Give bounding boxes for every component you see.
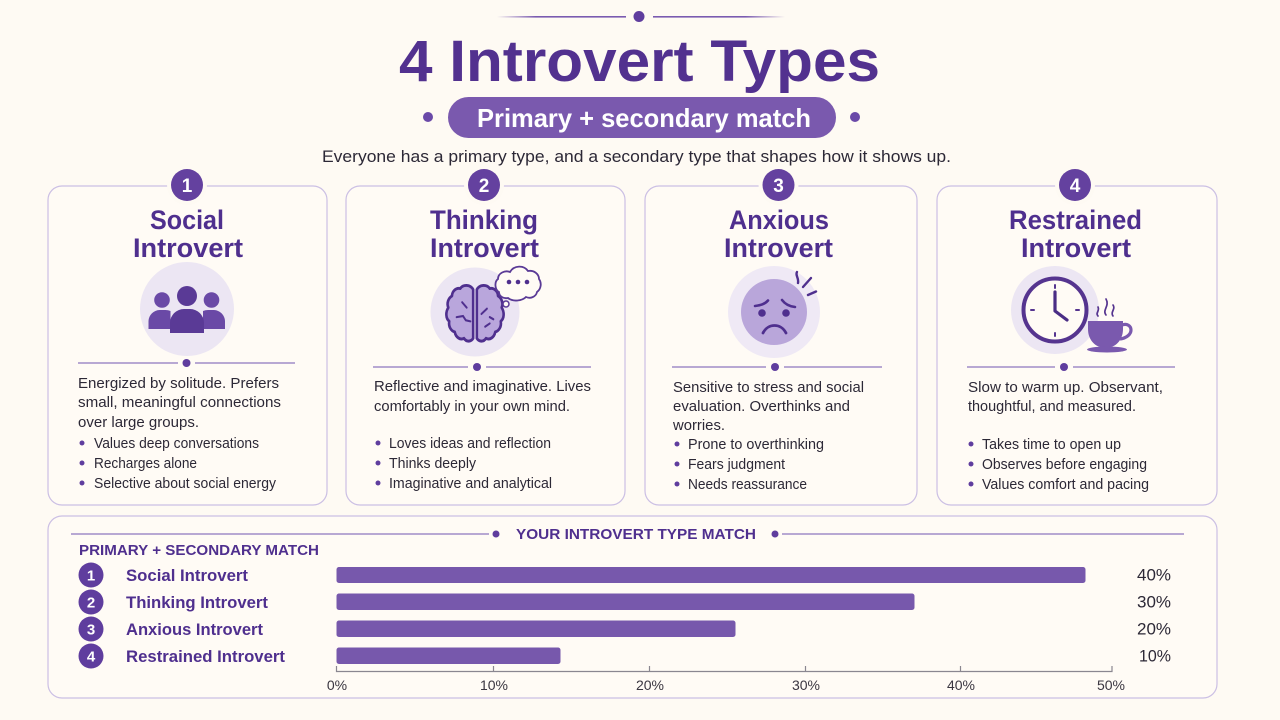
bar values	[1137, 566, 1171, 666]
description	[374, 379, 591, 415]
icon: worried face	[728, 266, 820, 358]
x axis: 50%	[1097, 677, 1125, 693]
divider	[967, 363, 1175, 371]
description	[968, 380, 1163, 415]
row labels: Anxious Introvert	[126, 621, 263, 639]
row labels: 4	[87, 648, 96, 666]
description: evaluation. Overthinks and	[673, 399, 850, 415]
number badge 3: 3	[773, 176, 784, 197]
number badge 1	[167, 165, 207, 205]
heading: social introvert: Social	[150, 205, 224, 235]
description: over large groups.	[78, 415, 199, 431]
description: small, meaningful connections	[78, 395, 281, 411]
divider	[78, 359, 295, 367]
heading: anxious introvert: Anxious	[729, 205, 829, 235]
number badge 2	[464, 165, 504, 205]
heading: thinking introvert: Introvert	[430, 233, 539, 263]
panel: anxious introvert	[645, 165, 917, 505]
description: Energized by solitude. Prefers	[78, 376, 279, 392]
row labels: Thinking Introvert	[126, 594, 269, 612]
heading: social introvert	[133, 205, 243, 263]
heading: anxious introvert: Introvert	[724, 233, 833, 263]
heading: restrained introvert: Introvert	[1021, 233, 1131, 263]
bullet list: Fears judgment	[688, 457, 785, 473]
description	[672, 380, 864, 434]
panel: restrained introvert	[937, 165, 1217, 505]
header ornament	[497, 11, 785, 22]
chart heading: YOUR INTROVERT TYPE MATCH	[516, 526, 756, 543]
x axis	[327, 666, 1125, 693]
x axis: 10%	[480, 677, 508, 693]
row labels: Social Introvert	[126, 567, 249, 585]
row labels	[78, 562, 286, 668]
panel: social introvert	[48, 165, 327, 505]
bullet list: Values deep conversations	[94, 436, 259, 452]
heading: anxious introvert	[724, 205, 833, 263]
description: thoughtful, and measured.	[968, 399, 1136, 415]
description: Slow to warm up. Observant,	[968, 380, 1163, 396]
heading: thinking introvert	[430, 205, 539, 263]
description: Reflective and imaginative. Lives	[374, 379, 591, 395]
x axis: 40%	[947, 677, 975, 693]
heading: social introvert: Introvert	[133, 233, 243, 263]
bar values: 30%	[1137, 594, 1171, 612]
bullet list	[376, 436, 552, 492]
bar values: 40%	[1137, 566, 1171, 584]
bullet list	[674, 437, 824, 493]
bullet list: Needs reassurance	[688, 477, 807, 493]
x axis: 0%	[327, 677, 347, 693]
chart heading	[71, 526, 1184, 543]
icon: brain with thought bubble	[430, 267, 541, 356]
bullet list: Recharges alone	[94, 456, 197, 472]
description: Sensitive to stress and social	[673, 380, 864, 396]
number badge 2: 2	[479, 176, 489, 197]
number badge 1: 1	[182, 176, 193, 197]
panel: thinking introvert	[346, 165, 625, 505]
bar chart	[336, 567, 1086, 664]
bullet list	[80, 436, 277, 492]
row labels: 3	[87, 622, 95, 638]
description: worries.	[672, 418, 725, 434]
bullet list: Prone to overthinking	[688, 437, 824, 453]
bullet list	[968, 437, 1149, 493]
bullet list: Loves ideas and reflection	[389, 436, 551, 452]
x axis: 30%	[792, 677, 820, 693]
intro sentence: Everyone has a primary type, and a secondary type that shapes how it shows up.	[322, 147, 951, 166]
bullet list: Takes time to open up	[982, 437, 1121, 453]
divider	[672, 363, 882, 371]
number badge 3	[758, 165, 798, 205]
bullet list: Thinks deeply	[389, 456, 477, 472]
chart subheading: PRIMARY + SECONDARY MATCH	[79, 543, 319, 559]
heading: thinking introvert: Thinking	[430, 205, 538, 235]
subtitle pill	[423, 97, 860, 138]
bullet list: Observes before engaging	[982, 457, 1147, 473]
title: 4 Introvert Types	[399, 29, 880, 94]
row labels: Restrained Introvert	[126, 648, 286, 666]
heading: restrained introvert: Restrained	[1009, 205, 1142, 235]
panel: type match chart	[48, 516, 1217, 698]
bar values: 20%	[1137, 620, 1171, 638]
divider	[373, 363, 591, 371]
icon: clock and coffee cup	[1011, 266, 1131, 354]
number badge 4	[1055, 165, 1095, 205]
bullet list: Selective about social energy	[94, 476, 277, 492]
description: comfortably in your own mind.	[374, 399, 570, 415]
bar values: 10%	[1139, 648, 1171, 666]
bullet list: Imaginative and analytical	[389, 476, 552, 492]
icon: group of people	[140, 262, 234, 356]
row labels: 2	[87, 594, 95, 612]
description	[78, 376, 281, 431]
bullet list: Values comfort and pacing	[982, 477, 1149, 493]
heading: restrained introvert	[1009, 205, 1142, 263]
number badge 4: 4	[1070, 176, 1081, 197]
subtitle pill: Primary + secondary match	[477, 103, 811, 133]
x axis: 20%	[636, 677, 664, 693]
row labels: 1	[87, 568, 95, 584]
